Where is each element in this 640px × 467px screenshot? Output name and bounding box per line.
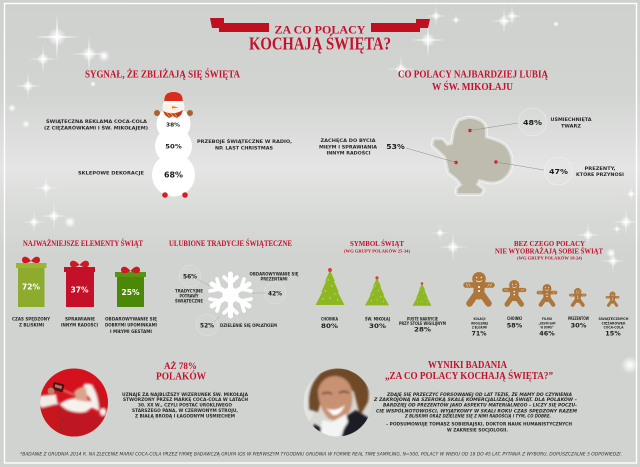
text block: podsumowanie: W ZAKRESIE SOCJOLOGII. xyxy=(447,428,508,432)
text block: podsumowanie: Z ZAKROJONĄ NA SZEROKĄ SKALĘ KOMERCJALIZACJĄ ŚWIĄT. DLA POLAKÓW – xyxy=(373,397,577,402)
label: reklama: (Z CIĘŻARÓWKAMI I ŚW. MIKOŁAJEM) xyxy=(44,126,148,130)
footnote: *BADANIE Z GRUDNIA 2014 R. NA ZLECENIE MARKI COCA-COLA PRZEZ FIRMĘ BADAWCZĄ GRUPA IQS W PIERWSZYM TYGODNIU GRUDNIA W FORMIE REAL TIME SAMPLING, N=500, POLACY W WIEKU OD 18 DO 45 LAT, PYTANIA Z WYBORU, DOPUSZCZALNE 5 ODPOWIEDZI. xyxy=(20,452,622,457)
text block: podsumowanie: – PODSUMOWUJE TOMASZ SOBIERAJSKI, DOKTOR NAUK HUMANISTYCZNYCH xyxy=(386,422,573,427)
heading: bez czego: (WG GRUPY POLAKÓW 18-24) xyxy=(517,256,583,260)
santa silhouette xyxy=(434,119,510,193)
label: film: FILMU xyxy=(542,316,552,321)
connector lines xyxy=(197,279,266,322)
label: prezentów xyxy=(568,316,589,330)
label: prezentami xyxy=(250,272,299,282)
label: choinki: CHOINKI xyxy=(507,316,522,321)
label: sprawianie xyxy=(61,316,98,328)
label: prezenty: KTÓRE PRZYNOSI xyxy=(576,172,624,177)
label: sprawianie: SPRAWIANIE xyxy=(65,316,95,322)
heading: symbol xyxy=(344,238,411,253)
label: zachęca: ZACHĘCA DO BYCIA xyxy=(320,138,376,143)
heading: bez czego: BEZ CZEGO POLACY xyxy=(514,239,585,248)
snowman value 50%: 50% xyxy=(165,142,182,150)
label: przeboje: NP. LAST CHRISTMAS xyxy=(215,146,273,150)
label: puste nakrycie xyxy=(399,316,446,334)
text block: wizerunek: STWORZONY PRZEZ MARKĘ COCA-COLA W LATACH xyxy=(123,397,249,402)
label: twarz xyxy=(550,117,592,128)
gift 37%: 37% xyxy=(70,286,88,294)
gift 72% xyxy=(16,257,46,307)
value circle 52%: 52% xyxy=(200,324,214,330)
text block: wizerunek xyxy=(122,392,249,418)
panel: tradycje xyxy=(169,238,299,336)
label: zachęca: MIŁYM I SPRAWIANIA xyxy=(319,144,378,149)
heading: symbol: (WG GRUPY POLAKÓW 25-34) xyxy=(344,248,411,253)
heading: aż 78%: POLAKÓW xyxy=(156,370,206,382)
label: obdarowywanie: OBDAROWYWANIE SIĘ xyxy=(105,316,157,322)
heading: aż 78% xyxy=(156,360,206,382)
value 53%: 53% xyxy=(386,143,405,151)
title: KOCHAJĄ ŚWIĘTA? xyxy=(249,34,391,54)
santa photo xyxy=(38,368,108,437)
gift 25% xyxy=(115,267,146,307)
panel: mikołaj xyxy=(319,70,624,193)
label: film: 46% xyxy=(539,330,555,338)
label: prezentów: 30% xyxy=(570,323,587,330)
label: kolacja: 71% xyxy=(472,330,487,338)
label: film xyxy=(538,316,556,338)
value circle 48% xyxy=(518,108,546,136)
heading: tradycje: ULUBIONE TRADYCJE ŚWIĄTECZNE xyxy=(169,238,292,248)
gingerbread 46% xyxy=(538,284,556,305)
heading: mikołaj: W ŚW. MIKOŁAJU xyxy=(432,81,513,93)
gingerbread 58% xyxy=(504,280,524,304)
label: prezentami: OBDAROWYWANIE SIĘ xyxy=(250,272,299,276)
label: obdarowywanie: I MIŁYMI GESTAMI xyxy=(110,329,152,334)
heading: mikołaj: CO POLACY NAJBARDZIEJ LUBIĄ xyxy=(398,70,549,80)
tree 28% xyxy=(412,282,432,306)
heading: symbol: SYMBOL ŚWIĄT xyxy=(350,238,405,248)
text block: podsumowanie: Z BLISKIMI ORAZ DZIELENIE SIĘ Z NIMI RADOŚCIĄ I TYM, CO DOBRE. xyxy=(404,414,551,419)
panel: aż 78% xyxy=(38,360,249,437)
label: kolacja: WIGILIJNEJ xyxy=(471,320,488,325)
panel: sygnał xyxy=(44,68,292,198)
text block: wizerunek: Z BIAŁĄ BRODĄ I ŁAGODNYM UŚMIECHEM xyxy=(135,414,235,418)
label: sprawianie: INNYM RADOŚCI xyxy=(61,322,98,328)
label: prezenty: PREZENTY, xyxy=(584,166,616,171)
gift 72%: 72% xyxy=(22,282,40,292)
label: ciężarówki: COCA-COLA xyxy=(604,324,624,330)
label: opłatek: DZIELENIE SIĘ OPŁATKIEM xyxy=(220,323,277,328)
heading: aż 78%: AŻ 78% xyxy=(164,360,197,372)
label: prezenty xyxy=(576,166,624,177)
snowflake xyxy=(210,274,251,316)
label: twarz: UŚMIECHNIĘTA xyxy=(550,117,592,122)
value circle 56%: 56% xyxy=(183,274,197,280)
sparkles xyxy=(8,4,640,374)
label: kolacja xyxy=(471,316,488,338)
snowman value 38%: 38% xyxy=(166,122,181,128)
panel: wyniki badania xyxy=(303,360,578,438)
label: przeboje xyxy=(197,139,292,150)
label: choinka: CHOINKA xyxy=(321,316,339,322)
heading: wyniki: WYNIKI BADANIA xyxy=(428,360,508,371)
label: zachęca xyxy=(319,138,378,156)
label: zachęca: INNYM RADOŚCI xyxy=(326,150,371,156)
label: św. mikołaj: ŚW. MIKOŁAJ xyxy=(365,316,390,322)
label: św. mikołaj: 30% xyxy=(369,323,387,330)
label: czas: CZAS SPĘDZONY xyxy=(12,316,51,322)
ribbon left xyxy=(210,18,269,32)
label: ciężarówki: CIĘŻARÓWEK xyxy=(602,320,626,325)
label: obdarowywanie: DOBRYMI UPOMINKAMI xyxy=(105,322,157,328)
heading: mikołaj xyxy=(398,70,549,93)
panel: elementy świąt xyxy=(12,238,157,334)
label: ciężarówki: 15% xyxy=(605,330,621,338)
gingerbread 30% xyxy=(571,288,585,305)
panel: symbol świąt xyxy=(316,238,446,334)
connector lines xyxy=(406,123,544,170)
snowman value 68%: 68% xyxy=(164,171,184,180)
label: choinka: 80% xyxy=(321,323,339,330)
heading: elementy: NAJWAŻNIEJSZE ELEMENTY ŚWIĄT xyxy=(23,238,143,248)
label: puste nakrycie: PRZY STOLE WIGILIJNYM xyxy=(399,321,446,326)
label: potrawy: ŚWIĄTECZNE xyxy=(175,299,203,304)
label: choinki: 58% xyxy=(507,323,523,330)
label: film: W DOMU” xyxy=(540,324,554,330)
value circle 47% xyxy=(544,157,572,185)
label: kolacja: KOLACJI xyxy=(474,316,486,321)
snowman xyxy=(152,92,195,198)
gift 37% xyxy=(64,261,95,307)
value circle 42%: 42% xyxy=(268,292,282,298)
label: kolacja: Z BLISKIMI xyxy=(472,324,487,330)
label: prezentów: PREZENTÓW xyxy=(568,316,589,321)
tree 80% xyxy=(316,268,344,305)
label: film: „KEVIN SAM xyxy=(538,320,556,325)
gingerbread 71% xyxy=(466,272,492,304)
value circle 48%: 48% xyxy=(523,119,542,127)
heading: wyniki: „ZA CO POLACY KOCHAJĄ ŚWIĘTA?” xyxy=(385,370,553,382)
gift 25%: 25% xyxy=(122,288,140,297)
label: czas xyxy=(12,316,51,328)
text block: wizerunek: 30. XX W., CZYLI POSTAĆ UROKLIWEGO xyxy=(138,402,232,408)
tree 30% xyxy=(365,276,389,305)
label: potrawy xyxy=(175,289,203,304)
text block: podsumowanie: BARDZIEJ OD PREZENTÓW JAKO ASPEKTU MATERIALNEGO – LICZY SIĘ POCZU- xyxy=(383,403,577,408)
label: puste nakrycie: PUSTE NAKRYCIE xyxy=(407,316,438,322)
title: ZA CO POLACY xyxy=(274,24,366,36)
expert photo xyxy=(303,367,372,438)
label: twarz: TWARZ xyxy=(561,123,581,128)
heading: sygnał: SYGNAŁ, ŻE ZBLIŻAJĄ SIĘ ŚWIĘTA xyxy=(85,68,241,80)
label: obdarowywanie xyxy=(105,316,157,334)
label: potrawy: TRADYCYJNE xyxy=(175,289,203,294)
label: ciężarówki: ŚWIĄTECZNYCH xyxy=(598,316,628,321)
label: puste nakrycie: 28% xyxy=(414,326,432,334)
label: czas: Z BLISKIMI xyxy=(19,322,44,328)
label: dekoracje: SKLEPOWE DEKORACJE xyxy=(78,170,144,176)
label: choinka xyxy=(321,316,339,330)
text block: wizerunek: STARSZEGO PANA, W CZERWONYM STROJU, xyxy=(132,408,238,413)
label: reklama xyxy=(44,119,148,130)
value circle 47%: 47% xyxy=(549,168,568,176)
label: potrawy: POTRAWY xyxy=(180,294,199,299)
label: choinki xyxy=(507,316,523,330)
heading: bez czego: NIE WYOBRAŻAJĄ SOBIE ŚWIĄT xyxy=(495,245,604,255)
label: przeboje: PRZEBOJE ŚWIĄTECZNE W RADIO, xyxy=(197,139,292,144)
label: ciężarówki xyxy=(598,316,628,338)
title xyxy=(210,18,430,54)
gingerbread 15% xyxy=(607,292,618,305)
text block: wizerunek: UZNAJE ZA NAJBLIŻSZY WIZERUNEK ŚW. MIKOŁAJA xyxy=(122,392,249,397)
label: reklama: ŚWIĄTECZNA REKLAMA COCA-COLA xyxy=(46,119,148,124)
label: prezentami: PREZENTAMI xyxy=(260,277,288,282)
heading: bez czego xyxy=(495,239,604,260)
panel: bez czego xyxy=(466,239,628,338)
heading: wyniki xyxy=(385,360,553,382)
label: św. mikołaj xyxy=(365,316,390,330)
text block: podsumowanie: CIE WSPÓLNOTOWOŚCI, WYJĄTKOWY W SKALI ROKU CZAS SPĘDZONY RAZEM xyxy=(376,408,578,413)
ribbon right xyxy=(371,19,430,32)
text block: podsumowanie: ZDAJĘ SIĘ PRZECZYĆ FORSOWANEJ OD LAT TEZIE, ŻE MAMY DO CZYNIENIA xyxy=(386,392,572,397)
text block: podsumowanie xyxy=(373,392,578,432)
